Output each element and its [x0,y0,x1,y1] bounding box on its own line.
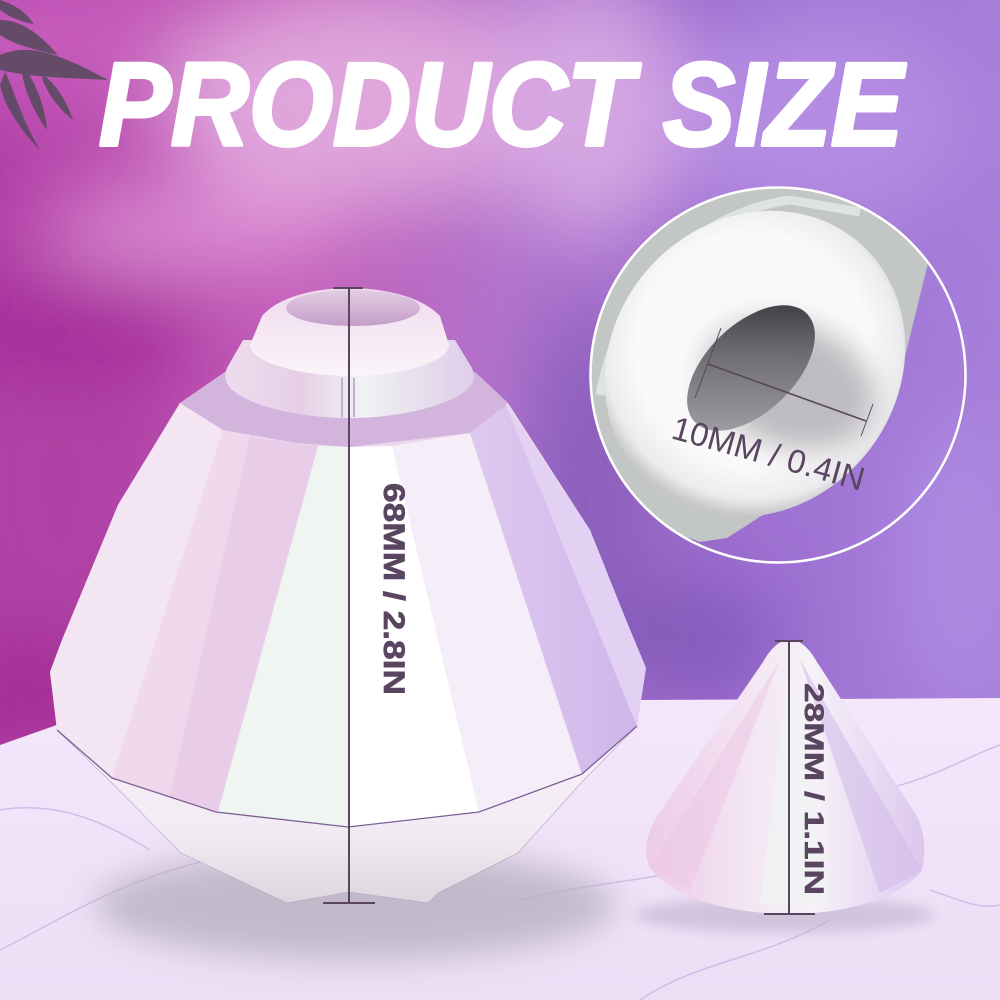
title: PRODUCT SIZE [99,39,906,171]
donut hole [687,305,815,431]
silicone tip [250,288,449,376]
white silicone donut [605,210,906,516]
facet: lilac right [470,403,637,774]
facet: pink central left [170,437,318,812]
facet: left outer [50,403,223,778]
measure line: 28mm height [764,641,815,914]
table shadow of main product [95,850,615,960]
grey bezel [590,170,928,542]
inner tube shading [691,305,888,464]
shoulder band [180,372,508,447]
label: 10mm: 10MM / 0.4IN [668,409,869,498]
icon: palm leaves [0,0,108,150]
label: 28mm: 28MM / 1.1IN [799,683,829,895]
measure line: 68mm height [323,288,375,903]
cone cap [646,640,924,914]
seam line [57,726,637,827]
marble table [0,692,1000,1000]
lower white shell [57,726,637,903]
facet: pale grain right [392,433,582,812]
tip opening [286,290,420,326]
facet: iridescent green-white [218,446,349,827]
close-up of opening [592,188,928,542]
background wall [0,0,1000,760]
collar notch [342,378,354,417]
facet: white centre [348,446,479,827]
detail callout circle [589,186,967,564]
cone facets [760,655,830,905]
main product: large diamond-shaped device [50,288,646,903]
table shadow of cone [635,897,935,933]
facet: left pink [112,430,250,812]
body silhouette [50,372,646,827]
collar ring [225,340,474,418]
facet: outer right [505,403,646,726]
hole measure line [695,328,873,436]
label: 68mm: 68MM / 2.8IN [377,483,410,695]
